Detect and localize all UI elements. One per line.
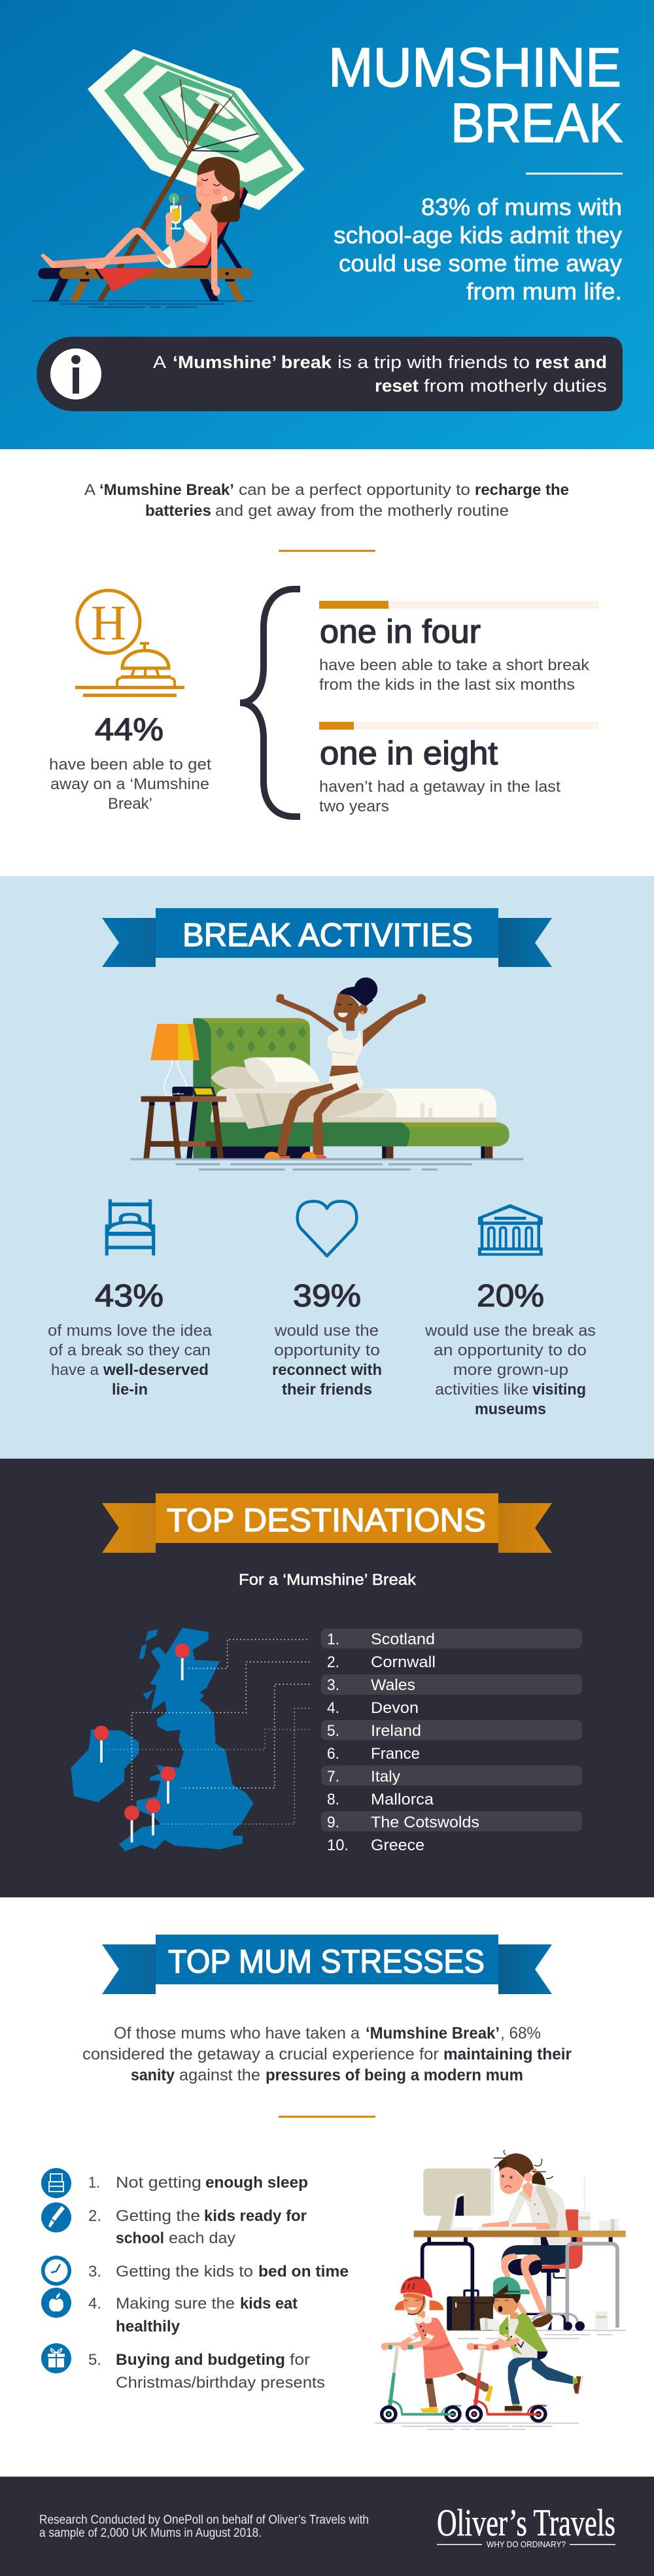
stat: 44%: 44% (95, 713, 164, 747)
paragraph: pressures of being a modern mum (266, 2066, 523, 2084)
list: top ten destinations: 10. (327, 1837, 349, 1854)
source note: Research Conducted by OnePoll on behalf of Oliver’s Travels with (39, 2513, 369, 2527)
callout text: ‘Mumshine’ break (173, 352, 332, 372)
title: BREAK (451, 92, 623, 154)
activity: lie-in (48, 1199, 213, 1398)
intro text: recharge the (475, 481, 569, 499)
activity: lie-in: have a (51, 1361, 99, 1379)
stat: 44%: away on a ‘Mumshine (50, 775, 209, 793)
list: top ten destinations: 2. (327, 1653, 339, 1671)
stress 3: bedtime: bed on time (258, 2263, 349, 2280)
heading ribbon: top mum stresses (102, 1935, 552, 1994)
list: top ten destinations: 1. (327, 1631, 339, 1648)
panel: break activities (0, 876, 654, 1459)
activity: museums: would use the break as (424, 1322, 596, 1340)
paragraph: considered the getaway a crucial experience for (82, 2045, 439, 2063)
stress list (41, 2168, 349, 2392)
callout text: reset (375, 376, 419, 396)
subtitle text: could use some time away (339, 250, 622, 277)
activity: reconnect: 39% (293, 1279, 361, 1313)
source note: a sample of 2,000 UK Mums in August 2018. (39, 2526, 262, 2540)
intro text (84, 481, 569, 520)
stress 3: bedtime (41, 2256, 349, 2286)
list: top ten destinations: 9. (327, 1814, 339, 1831)
intro text: can be a perfect opportunity to (239, 481, 470, 499)
activity: lie-in: lie-in (112, 1381, 148, 1398)
callout text: rest and (535, 352, 607, 372)
stress 2: school: school (116, 2229, 164, 2247)
activity: museums: more grown-up (453, 1361, 568, 1379)
stat: one in eight: one in eight (320, 735, 498, 771)
stress 5: presents (41, 2343, 325, 2392)
paragraph: against the (179, 2066, 260, 2084)
list: top ten destinations: Wales (371, 1676, 415, 1694)
intro text: batteries (145, 502, 211, 520)
map: UK and Ireland with pins (71, 1628, 309, 1852)
subtitle text: school-age kids admit they (334, 222, 622, 248)
activity: museums: an opportunity to do (434, 1342, 587, 1359)
intro text: and get away from the motherly routine (215, 502, 509, 520)
list: top ten destinations: The Cotswolds (371, 1814, 479, 1831)
heading ribbon: top mum stresses: TOP MUM STRESSES (168, 1943, 485, 1980)
panel: footer (0, 2477, 654, 2576)
stress 4: healthy eating: 4. (88, 2295, 101, 2313)
paragraph: sanity (131, 2066, 175, 2084)
paragraph: Of those mums who have taken a (114, 2024, 360, 2042)
activity: reconnect: opportunity to (274, 1342, 380, 1359)
list: top ten destinations: 4. (327, 1699, 339, 1717)
heading ribbon: break activities: BREAK ACTIVITIES (182, 917, 473, 953)
heading ribbon: break activities (102, 908, 552, 967)
stress 2: school: each day (169, 2229, 235, 2247)
activity: lie-in: well-deserved (103, 1361, 209, 1379)
title: MUMSHINE (328, 37, 621, 98)
subtitle text: 83% of mums with (421, 194, 622, 220)
list: top ten destinations: Scotland (371, 1631, 435, 1648)
title (328, 37, 623, 154)
stress 5: presents: Christmas/birthday presents (116, 2374, 325, 2392)
stat: 44%: Break’ (108, 795, 152, 813)
illustration: woman stretching on bed (130, 977, 523, 1170)
list: top ten destinations: Mallorca (371, 1791, 434, 1808)
stat: 44%: have been able to get (49, 756, 211, 773)
stress 1: sleep (41, 2168, 308, 2198)
stress 5: presents: Buying and budgeting (116, 2351, 285, 2369)
stress 2: school: kids ready for (204, 2207, 307, 2225)
stress 1: sleep: Not getting (116, 2174, 201, 2192)
heading ribbon: top destinations: TOP DESTINATIONS (167, 1502, 486, 1538)
list: top ten destinations: 3. (327, 1676, 339, 1694)
subtitle text: from mum life. (466, 278, 622, 305)
activity: reconnect: their friends (282, 1381, 372, 1398)
stat: one in four: one in four (320, 613, 481, 650)
stress 1: sleep: enough sleep (205, 2174, 308, 2192)
source note (39, 2513, 369, 2540)
stress 5: presents: for (290, 2351, 310, 2369)
activity: lie-in: of a break so they can (49, 1342, 211, 1359)
brace (240, 589, 300, 817)
list: top ten destinations: Italy (371, 1768, 400, 1786)
stress 4: healthy eating: kids eat (240, 2295, 298, 2313)
stress 1: sleep: 1. (88, 2174, 100, 2192)
stress 4: healthy eating: healthily (116, 2318, 181, 2335)
progress bar: one in eight (319, 722, 598, 730)
panel: intro statistics (0, 449, 654, 876)
icon: bed (105, 1199, 155, 1255)
list: top ten destinations: 8. (327, 1791, 339, 1808)
activity: lie-in: 43% (95, 1279, 164, 1313)
callout text: from motherly duties (424, 376, 607, 396)
activity: reconnect (272, 1201, 382, 1398)
icon: heart (298, 1201, 356, 1256)
stat: one in eight: two years (319, 798, 389, 815)
icon: museum (478, 1204, 543, 1256)
subtitle text (334, 194, 622, 305)
paragraph: maintaining their (443, 2045, 572, 2063)
stat: one in eight (319, 722, 598, 815)
panel: hero header (0, 0, 654, 449)
icon: hotel bell (75, 590, 184, 697)
illustration: stressed mum at desk with kids on scooters (375, 2150, 626, 2430)
callout text: A (153, 352, 166, 372)
activity: lie-in: of mums love the idea (48, 1322, 213, 1340)
panel: top destinations (0, 1459, 654, 1897)
progress bar: one in four (319, 601, 598, 609)
list: top ten destinations: Greece (371, 1837, 424, 1854)
activity: museums: 20% (477, 1279, 544, 1313)
callout text (153, 352, 607, 396)
list: top ten destinations: 5. (327, 1722, 339, 1740)
stat: one in four (319, 601, 598, 694)
list: top ten destinations: Devon (371, 1699, 419, 1717)
list: top ten destinations: Cornwall (371, 1653, 436, 1671)
stat: one in four: have been able to take a short break (319, 656, 590, 674)
list: top ten destinations: France (371, 1745, 420, 1763)
activity: reconnect: would use the (274, 1322, 379, 1340)
activity: museums: museums (475, 1400, 546, 1418)
stress 2: school: 2. (88, 2207, 101, 2225)
callout: definition box (37, 337, 623, 411)
icon: hotel bell: H (91, 596, 126, 651)
stat: 44% (49, 713, 211, 813)
activity: museums: activities like (435, 1381, 528, 1398)
paragraph: , 68% (500, 2024, 541, 2042)
list: top ten destinations: Ireland (371, 1722, 421, 1740)
logo: Oliver's Travels: WHY DO ORDINARY? (487, 2539, 566, 2549)
paragraph (82, 2024, 572, 2084)
list: top ten destinations: 7. (327, 1768, 339, 1786)
activity: museums (424, 1204, 596, 1418)
stress 2: school (41, 2202, 307, 2247)
icon: info (50, 348, 101, 399)
stress 3: bedtime: Getting the kids to (116, 2263, 253, 2280)
paragraph: ‘Mumshine Break’ (366, 2024, 500, 2042)
list: top ten destinations (321, 1629, 582, 1854)
stat: one in eight: haven’t had a getaway in the last (319, 778, 560, 796)
list: top ten destinations: 6. (327, 1745, 339, 1763)
activity: reconnect: reconnect with (272, 1361, 382, 1379)
activity: museums: visiting (532, 1381, 586, 1398)
stress 3: bedtime: 3. (88, 2263, 101, 2280)
heading ribbon: top destinations (102, 1493, 552, 1553)
intro text: A (84, 481, 95, 499)
stress 4: healthy eating (41, 2288, 298, 2335)
stress 4: healthy eating: Making sure the (116, 2295, 235, 2313)
stress 2: school: Getting the (116, 2207, 200, 2225)
callout text: is a trip with friends to (337, 352, 530, 372)
stat: one in four: from the kids in the last six months (319, 676, 575, 694)
illustration: woman relaxing on sun lounger under umbrella (32, 49, 305, 308)
subheading: For a ‘Mumshine’ Break (239, 1571, 417, 1589)
panel: top mum stresses (0, 1897, 654, 2477)
stress 5: presents: 5. (88, 2351, 101, 2369)
intro text: ‘Mumshine Break’ (99, 481, 234, 499)
